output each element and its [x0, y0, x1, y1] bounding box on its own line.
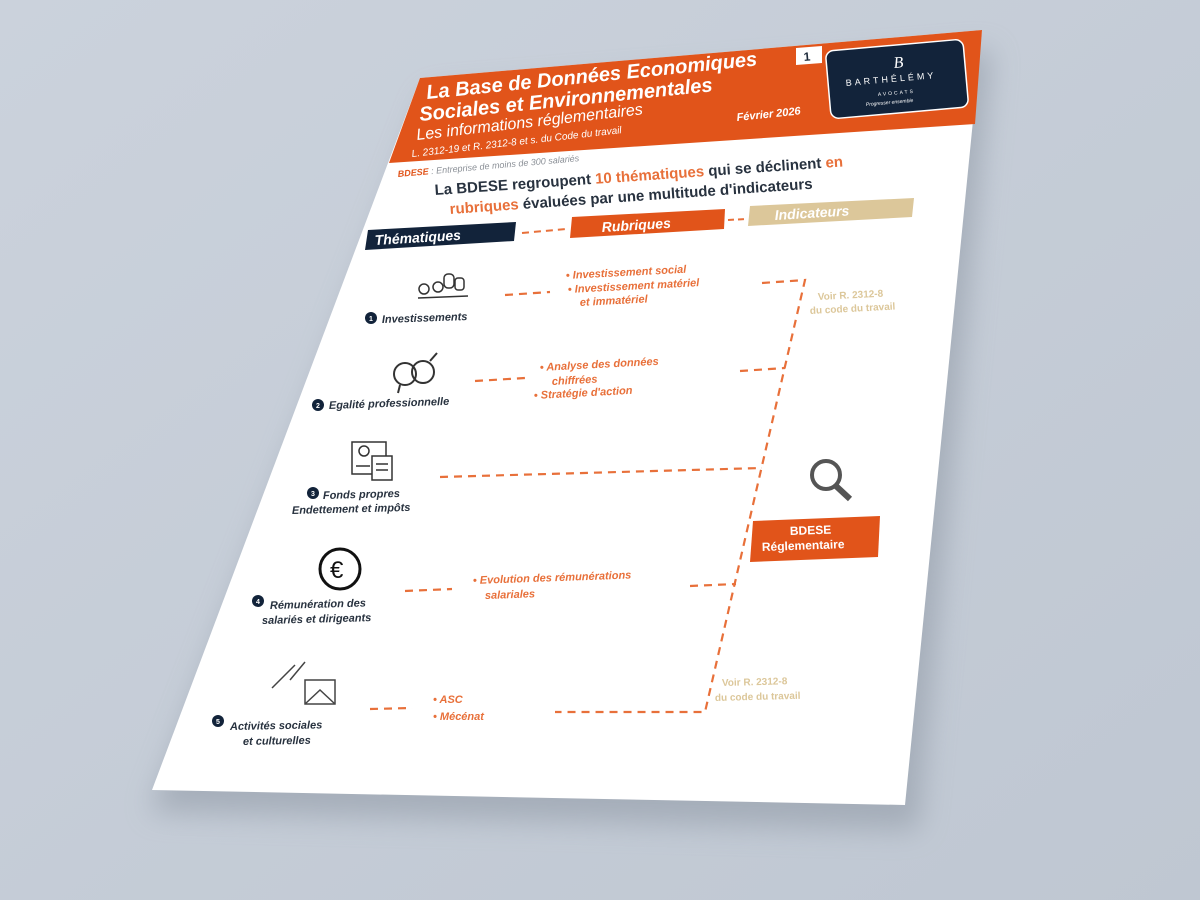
label 3: Endettement et impôts [292, 502, 411, 517]
connector lines [370, 280, 805, 712]
row 3 [292, 442, 411, 517]
rubriques 2 [534, 356, 659, 402]
logo: Progresser ensemble [866, 98, 914, 108]
tab: thematiques [365, 222, 516, 250]
note top: Voir R. 2312-8 [818, 289, 884, 303]
rubriques 5: • Mécénat [433, 711, 485, 723]
BDESE box: Réglementaire [762, 537, 845, 554]
rubriques 5 [433, 694, 485, 723]
row 2 [312, 353, 659, 412]
icon: equality [394, 353, 437, 393]
scope note: BDESE : Entreprise de moins de 300 salariés [397, 153, 580, 179]
label 3: 3 [311, 491, 315, 498]
rubriques 2: • Analyse des données [540, 356, 659, 374]
label 4 [252, 595, 371, 627]
rubriques 4: salariales [485, 588, 535, 602]
tab: rubriques [570, 209, 725, 238]
page shadow [150, 50, 992, 830]
icon: party [272, 662, 335, 704]
page [152, 30, 982, 805]
note bottom: du code du travail [715, 691, 801, 704]
logo: B [893, 54, 904, 72]
note bottom: Voir R. 2312-8 [722, 676, 788, 689]
label 3 [292, 487, 411, 517]
rubriques 1: • Investissement matériel [568, 277, 701, 296]
logo: BARTHÉLÉMY [845, 70, 937, 88]
label 5: Activités sociales [229, 719, 322, 733]
rubriques 4: • Evolution des rémunérations [473, 569, 632, 587]
label 5: et culturelles [243, 735, 311, 748]
label 4: 4 [256, 599, 260, 606]
label 2: 2 [316, 403, 320, 410]
BDESE box [750, 516, 880, 562]
row 4 [252, 549, 632, 627]
rubriques 1 [566, 264, 701, 309]
tab: indicateurs [748, 198, 914, 226]
logo [825, 39, 969, 119]
subtitle: Les informations réglementaires [416, 101, 644, 144]
note bottom [715, 676, 801, 704]
icon: finance [352, 442, 392, 480]
row 5 [212, 662, 801, 748]
header band [389, 30, 982, 163]
header band: Sociales et Environnementales [418, 74, 714, 126]
icon: euro: € [330, 557, 344, 584]
logo: AVOCATS [878, 89, 915, 98]
rubriques 1: • Investissement social [566, 264, 688, 282]
rubriques 2: • Stratégie d'action [534, 385, 633, 402]
heading: rubriques évaluées par une multitude d'indicateurs [449, 176, 813, 218]
rubriques 2: chiffrées [552, 374, 598, 388]
BDESE box: BDESE [790, 523, 831, 538]
tab: rubriques: Rubriques [601, 215, 671, 235]
page number [796, 46, 822, 65]
title: La Base de Données Economiques [425, 49, 758, 104]
note top: du code du travail [810, 302, 896, 317]
label 3: Fonds propres [323, 488, 400, 502]
date: Février 2026 [736, 105, 802, 124]
tab: thematiques: Thématiques [374, 227, 462, 248]
label 1: 1 [369, 316, 373, 323]
row 1 [365, 264, 896, 326]
note top [810, 289, 896, 317]
rubriques 1: et immatériel [580, 293, 649, 309]
label 4: salariés et dirigeants [262, 612, 371, 627]
tab: indicateurs: Indicateurs [774, 202, 850, 223]
label 5 [212, 715, 322, 748]
label 1: Investissements [382, 311, 468, 326]
tabs [365, 198, 914, 250]
icon: magnifier [812, 461, 850, 499]
label 5: 5 [216, 719, 220, 726]
label 2: Egalité professionnelle [329, 396, 449, 412]
page number: 1 [803, 49, 811, 64]
rubriques 4 [473, 569, 632, 602]
header band: L. 2312-19 et R. 2312-8 et s. du Code du travail [411, 125, 623, 160]
label 4: Rémunération des [270, 597, 366, 612]
heading: La BDESE regroupent 10 thématiques qui se déclinent en [434, 153, 844, 199]
icon: euro [320, 549, 360, 589]
rubriques 5: • ASC [433, 694, 464, 706]
icon: people [418, 274, 468, 298]
